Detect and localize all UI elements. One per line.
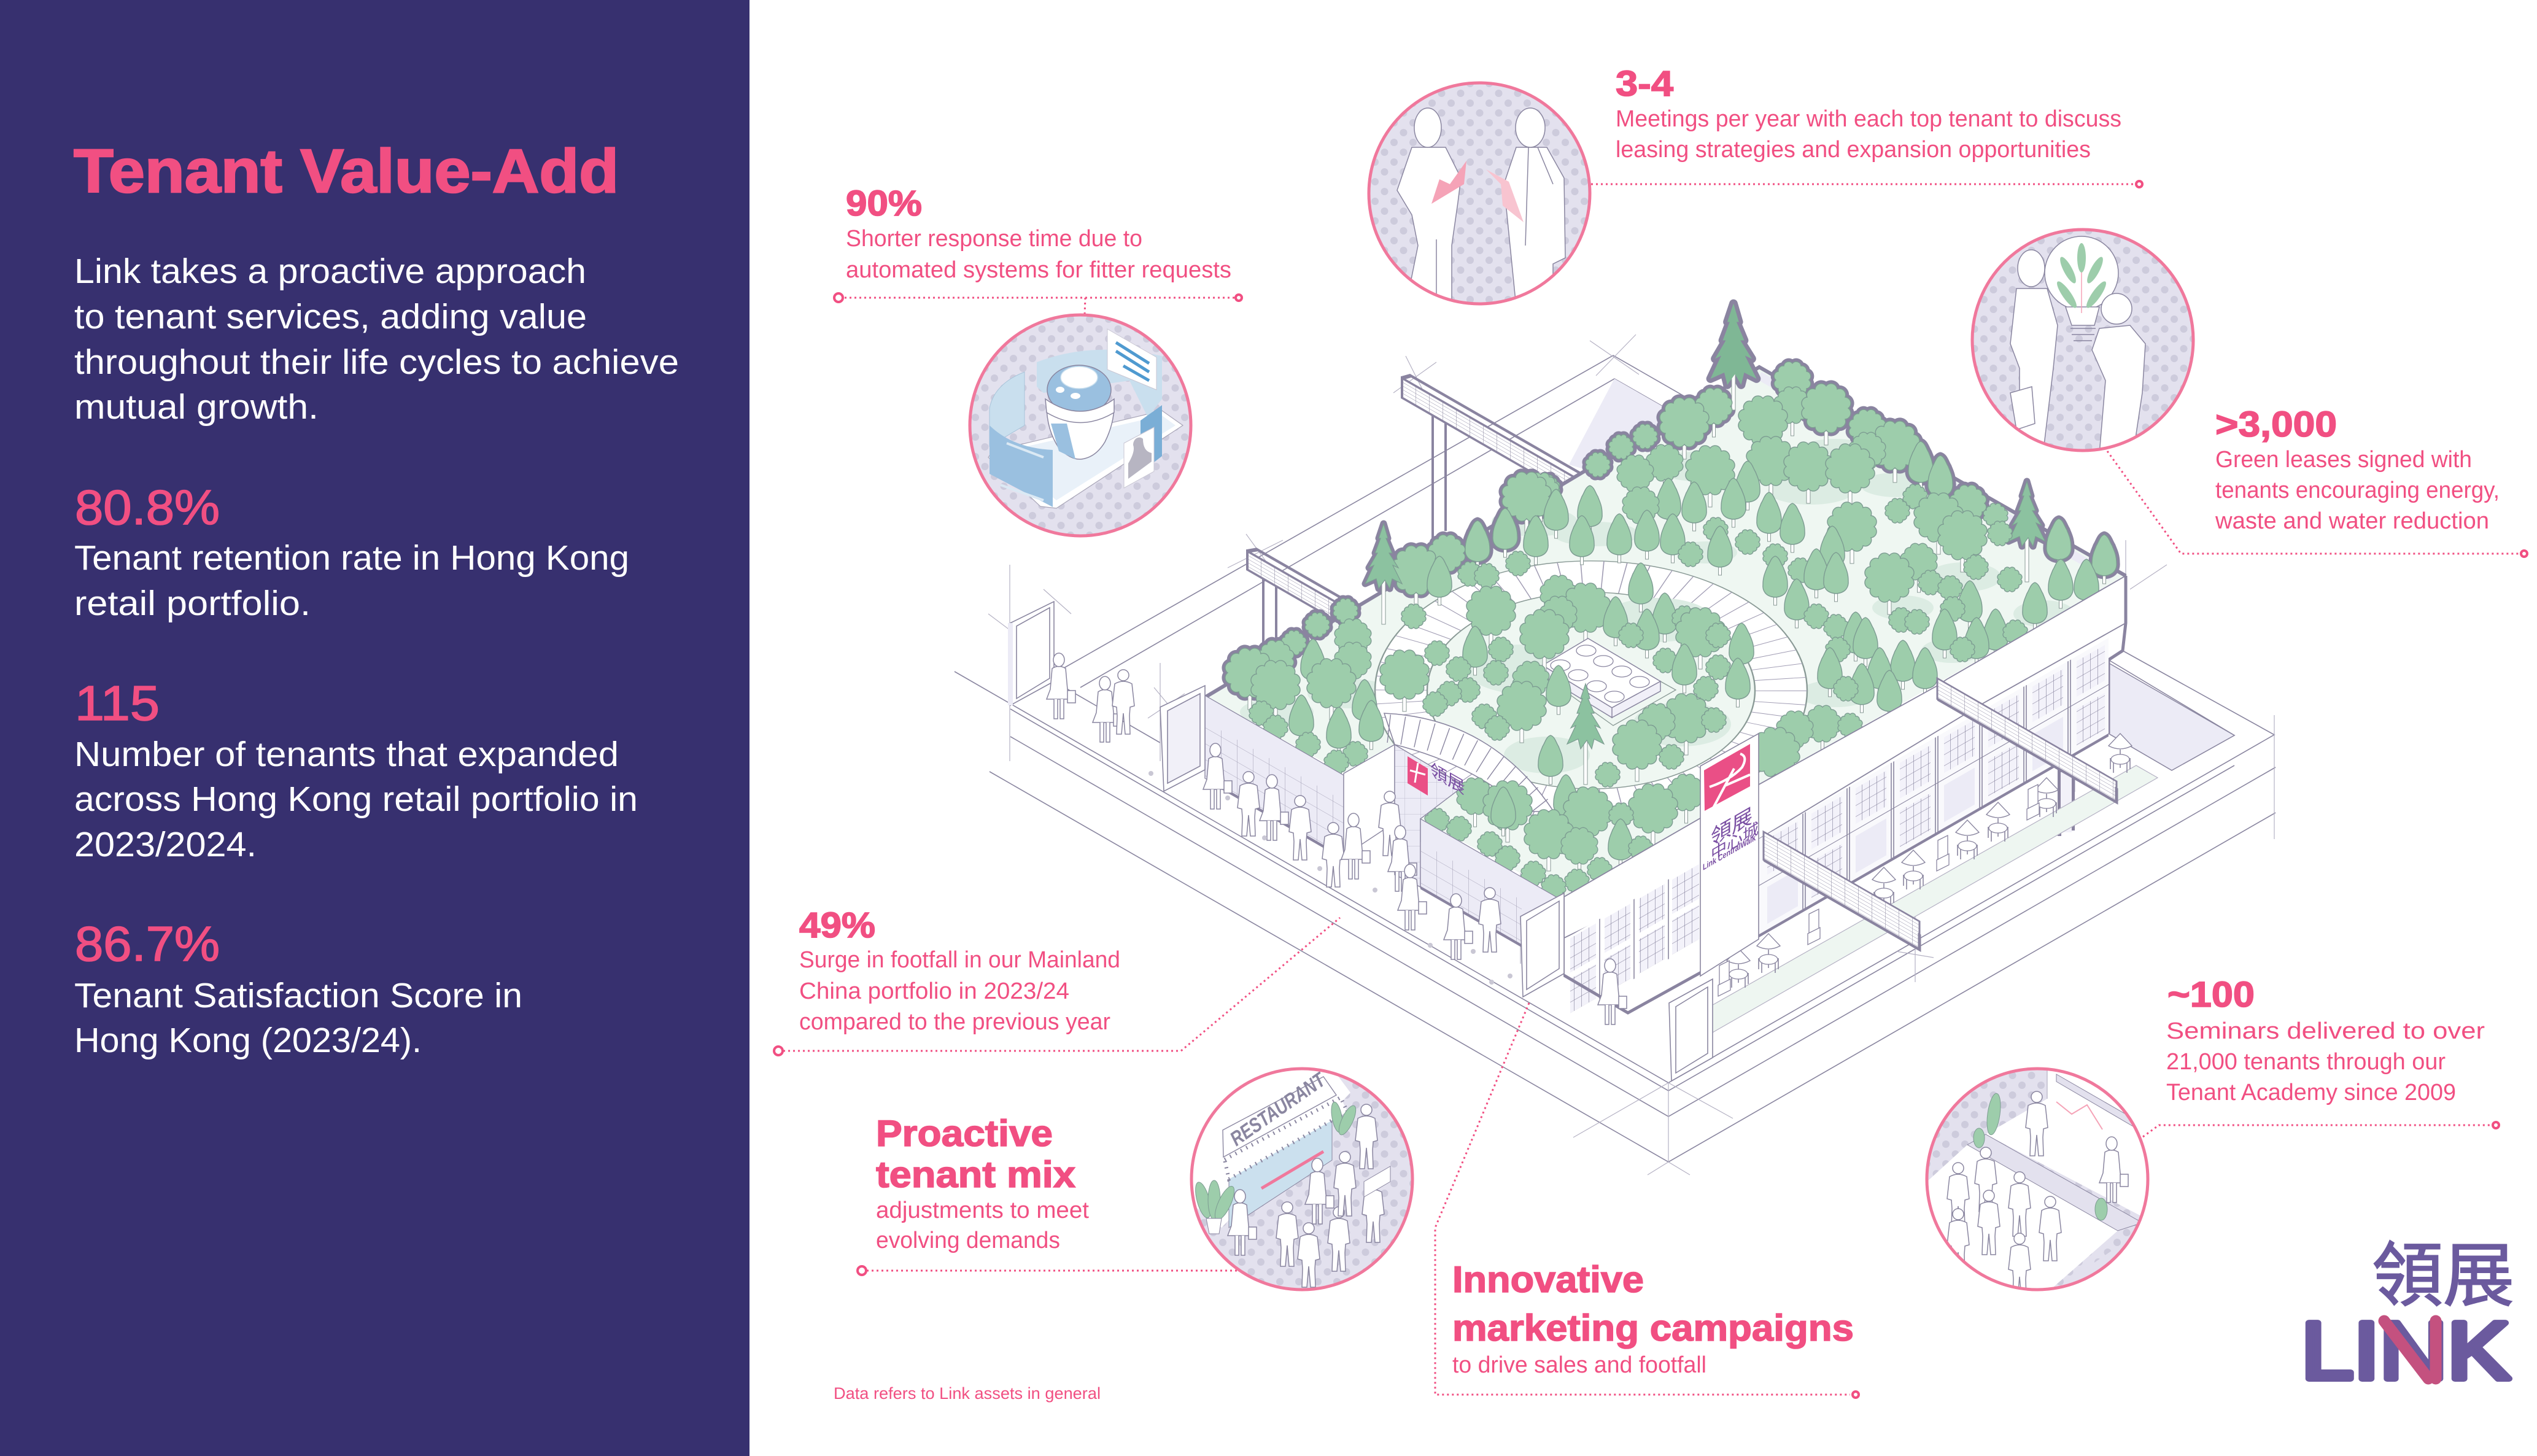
entrance wall with logo	[1395, 745, 1465, 887]
illustration: isometric building with roof garden	[955, 303, 2276, 1175]
right courtyard wall	[2109, 663, 2234, 770]
icon: seminar circle	[1918, 1065, 2152, 1298]
title: Tenant Value-Add	[74, 137, 619, 206]
light shafts	[1228, 537, 1433, 694]
callout: 3-4 meetings: Meetings per year with each top tenant to discuss	[1616, 106, 2121, 132]
callout: ~100 seminars: ~100	[2167, 975, 2255, 1015]
stat: tenants expanded: Number of tenants that expanded	[74, 735, 619, 774]
stat: retention rate: retail portfolio.	[74, 584, 311, 623]
panel: left intro sidebar	[0, 0, 749, 1456]
bridge: upper left posts	[1263, 408, 1446, 646]
gates	[1010, 602, 1713, 1081]
callout: 49% footfall: China portfolio in 2023/24	[799, 978, 1069, 1004]
entrance wall with logo: 領展	[1430, 759, 1465, 799]
pedestrians	[1047, 653, 1627, 1024]
bridge: upper right	[1937, 678, 2117, 802]
footnote: Data refers to Link assets in general	[834, 1384, 1101, 1403]
icon: tenant meeting circle	[1369, 83, 1590, 307]
second tiled wall	[1420, 819, 1564, 970]
right facade posts	[2059, 765, 2073, 836]
callout: >3,000 green leases: waste and water reduction	[2215, 508, 2489, 534]
intro paragraph: Link takes a proactive approach	[74, 252, 586, 291]
callout: 90% response time	[834, 184, 1242, 315]
roof garden ground	[1205, 367, 2126, 897]
stat: retention rate	[74, 480, 629, 623]
stat: tenants expanded: 2023/2024.	[74, 825, 257, 864]
main facade windows	[1759, 638, 2109, 936]
stat: satisfaction score: Tenant Satisfaction Score in	[74, 976, 522, 1015]
icon: robot assistant circle	[970, 315, 1191, 536]
construction ticks	[988, 335, 2274, 1175]
shop sign: Link CentralWalk: 領展	[1711, 803, 1753, 850]
icon: restaurant opening circle: RESTAURANT	[1226, 1067, 1330, 1150]
front band and corner facade	[1564, 576, 2126, 976]
callout: proactive tenant mix	[858, 1113, 1238, 1275]
trees: front section	[1225, 608, 2028, 899]
trees: rear section	[1305, 362, 2117, 648]
entrance white block	[1344, 745, 1395, 856]
bridge: lower left	[1247, 544, 1353, 630]
garden ring path	[1375, 561, 1807, 820]
callout: ~100 seminars: 21,000 tenants through our	[2166, 1049, 2446, 1075]
stat: satisfaction score: Hong Kong (2023/24).	[74, 1021, 422, 1060]
logo: Link: LINK	[2301, 1306, 2510, 1396]
floor speckles	[1148, 771, 1513, 985]
stat: tenants expanded: across Hong Kong retail portfolio in	[74, 780, 638, 819]
callout: 49% footfall: 49%	[799, 905, 875, 945]
back wall wedge	[1569, 379, 1682, 473]
callout: innovative marketing campaigns	[1435, 1003, 1859, 1398]
callout: ~100 seminars	[2143, 975, 2499, 1137]
intro paragraph: to tenant services, adding value	[74, 297, 587, 336]
thick outline behind edge trees	[1225, 303, 2117, 697]
callout: 3-4 meetings: 3-4	[1616, 64, 1673, 104]
callout: 49% footfall	[774, 905, 1340, 1055]
callout: 3-4 meetings: leasing strategies and expansion opportunities	[1616, 137, 2091, 163]
stat: tenants expanded	[74, 676, 638, 864]
callout: 90% response time: 90%	[846, 184, 922, 223]
icon: green bulb circle	[1972, 230, 2193, 454]
callout: >3,000 green leases: Green leases signed with	[2215, 447, 2472, 473]
callout: proactive tenant mix: evolving demands	[876, 1228, 1060, 1253]
callout: ~100 seminars: Seminars delivered to over	[2166, 1018, 2485, 1044]
callout: 90% response time: automated systems for fitter requests	[846, 257, 1231, 283]
intro paragraph	[74, 252, 679, 427]
callout: 3-4 meetings	[1591, 64, 2142, 187]
intro paragraph: throughout their life cycles to achieve	[74, 343, 679, 382]
cafe tables	[1718, 734, 2132, 996]
grass patches	[1240, 439, 2075, 726]
left wall with tiles	[1205, 695, 1344, 858]
callout: >3,000 green leases: tenants encouraging energy,	[2215, 478, 2500, 503]
logo: Link: 領展	[2372, 1237, 2514, 1315]
edge pine tree	[1710, 303, 1757, 410]
stat: tenants expanded: 115	[75, 676, 160, 730]
callout: innovative marketing campaigns: marketing campaigns	[1452, 1307, 1854, 1349]
ground lines	[955, 355, 2276, 1162]
callout: 49% footfall: Surge in footfall in our Mainland	[799, 947, 1120, 973]
shop sign: Link CentralWalk: 中心城	[1711, 819, 1759, 864]
callout: proactive tenant mix: adjustments to meet	[876, 1198, 1089, 1223]
logo: Link	[2301, 1237, 2514, 1396]
shop sign: Link CentralWalk: Link CentralWalk	[1703, 832, 1756, 873]
callout: innovative marketing campaigns: Innovative	[1452, 1259, 1644, 1300]
toy brick block in garden	[1543, 638, 1676, 726]
planter strip	[1708, 765, 2158, 1035]
roof parapet outline	[1205, 367, 2126, 697]
bridge: upper left	[1402, 371, 1580, 500]
stat: retention rate: Tenant retention rate in Hong Kong	[74, 538, 629, 578]
stat: satisfaction score: 86.7%	[75, 916, 220, 971]
callout: proactive tenant mix: Proactive	[876, 1113, 1053, 1154]
icon: restaurant opening circle	[1191, 1067, 1412, 1290]
corner facade windows	[1567, 859, 1703, 1018]
arch walkway	[1384, 713, 1554, 811]
callout: 49% footfall: compared to the previous year	[799, 1009, 1110, 1035]
stat: retention rate: 80.8%	[75, 480, 220, 535]
callout: proactive tenant mix: tenant mix	[876, 1154, 1075, 1195]
callout: >3,000 green leases	[2107, 405, 2527, 557]
bridge: lower right	[1764, 832, 1919, 950]
callout: innovative marketing campaigns: to drive sales and footfall	[1452, 1352, 1706, 1378]
intro paragraph: mutual growth.	[74, 387, 319, 427]
inner lawn patches	[1467, 598, 1731, 773]
stat: satisfaction score	[74, 916, 522, 1060]
callout: 90% response time: Shorter response time due to	[846, 226, 1142, 252]
shop sign: Link CentralWalk	[1700, 734, 1759, 976]
callout: ~100 seminars: Tenant Academy since 2009	[2166, 1080, 2456, 1106]
callout: >3,000 green leases: >3,000	[2215, 405, 2337, 444]
